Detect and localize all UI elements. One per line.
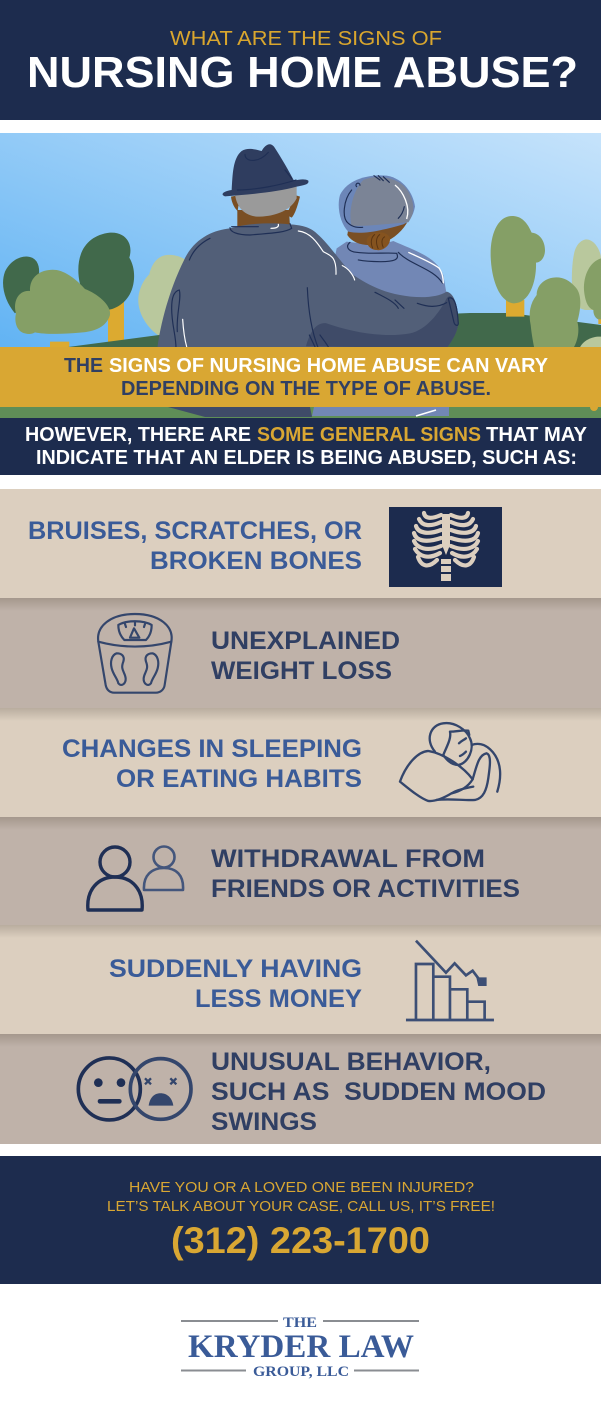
- couple: [157, 144, 458, 348]
- sign 3: sleeping: [0, 708, 601, 817]
- sign 1: bruises: BROKEN BONES: [150, 547, 362, 575]
- sign 4: withdrawal: FRIENDS OR ACTIVITIES: [211, 875, 520, 903]
- sign 1: bruises: [0, 489, 601, 598]
- icon: bathroom scale: [98, 614, 172, 693]
- sign 6: unusual behavior: UNUSUAL BEHAVIOR,: [211, 1048, 491, 1076]
- sign 6: unusual behavior: [0, 1034, 601, 1144]
- heading: what are the signs of: WHAT ARE THE SIGNS OF: [170, 28, 442, 50]
- illustration: elderly couple in park: [0, 133, 601, 358]
- gold banner: SIGNS OF NURSING HOME ABUSE CAN VARY: [109, 355, 549, 377]
- sign 2: weight loss: UNEXPLAINED: [211, 627, 400, 655]
- gold banner: DEPENDING ON THE TYPE OF ABUSE.: [121, 378, 491, 400]
- ground below banner: [0, 403, 601, 418]
- intro text panel: HOWEVER, THERE ARE: [25, 424, 251, 446]
- icon: two people: [88, 846, 183, 910]
- intro text panel: [0, 418, 601, 475]
- call to action panel: HAVE YOU OR A LOVED ONE BEEN INJURED?: [129, 1179, 474, 1196]
- sign 3: sleeping: CHANGES IN SLEEPING: [62, 735, 362, 763]
- logo: The Kryder Law Group: KRYDER LAW: [188, 1329, 414, 1365]
- intro text panel: SOME GENERAL SIGNS: [257, 424, 481, 446]
- trees left: [3, 233, 190, 352]
- gold banner: THE: [64, 355, 103, 377]
- title: NURSING HOME ABUSE?: [27, 48, 578, 97]
- icon: person sleeping on pillow: [400, 723, 500, 801]
- sign 6: unusual behavior: SUCH AS SUDDEN MOOD: [211, 1078, 546, 1106]
- icon: x-ray ribs: [389, 507, 502, 587]
- header panel: [0, 0, 601, 120]
- sign 2: weight loss: [0, 598, 601, 708]
- man: [157, 144, 458, 348]
- call to action panel: LET’S TALK ABOUT YOUR CASE, CALL US, IT’S FREE!: [107, 1198, 495, 1215]
- logo: The Kryder Law Group: GROUP, LLC: [253, 1364, 349, 1380]
- call to action panel: [0, 1156, 601, 1284]
- sign 4: withdrawal: WITHDRAWAL FROM: [211, 845, 485, 873]
- logo: The Kryder Law Group: [181, 1315, 419, 1380]
- sign 1: bruises: BRUISES, SCRATCHES, OR: [28, 517, 362, 545]
- sign 4: withdrawal: [0, 817, 601, 925]
- sign 5: less money: LESS MONEY: [195, 985, 362, 1013]
- hill: [68, 313, 601, 358]
- phone number: (312) 223-1700: [171, 1220, 430, 1261]
- sign 6: unusual behavior: SWINGS: [211, 1108, 317, 1136]
- trees right: [491, 216, 601, 348]
- woman: [317, 175, 447, 348]
- sign 5: less money: [0, 925, 601, 1034]
- logo: The Kryder Law Group: THE: [283, 1315, 317, 1331]
- icon: two faces: [78, 1058, 191, 1120]
- intro text panel: THAT MAY: [486, 424, 588, 446]
- intro text panel: INDICATE THAT AN ELDER IS BEING ABUSED, SUCH AS:: [36, 447, 577, 469]
- sign 3: sleeping: OR EATING HABITS: [116, 765, 362, 793]
- gold banner: [0, 347, 601, 407]
- sign 5: less money: SUDDENLY HAVING: [109, 955, 362, 983]
- sign 2: weight loss: WEIGHT LOSS: [211, 657, 392, 685]
- icon: falling bar chart: [406, 941, 494, 1020]
